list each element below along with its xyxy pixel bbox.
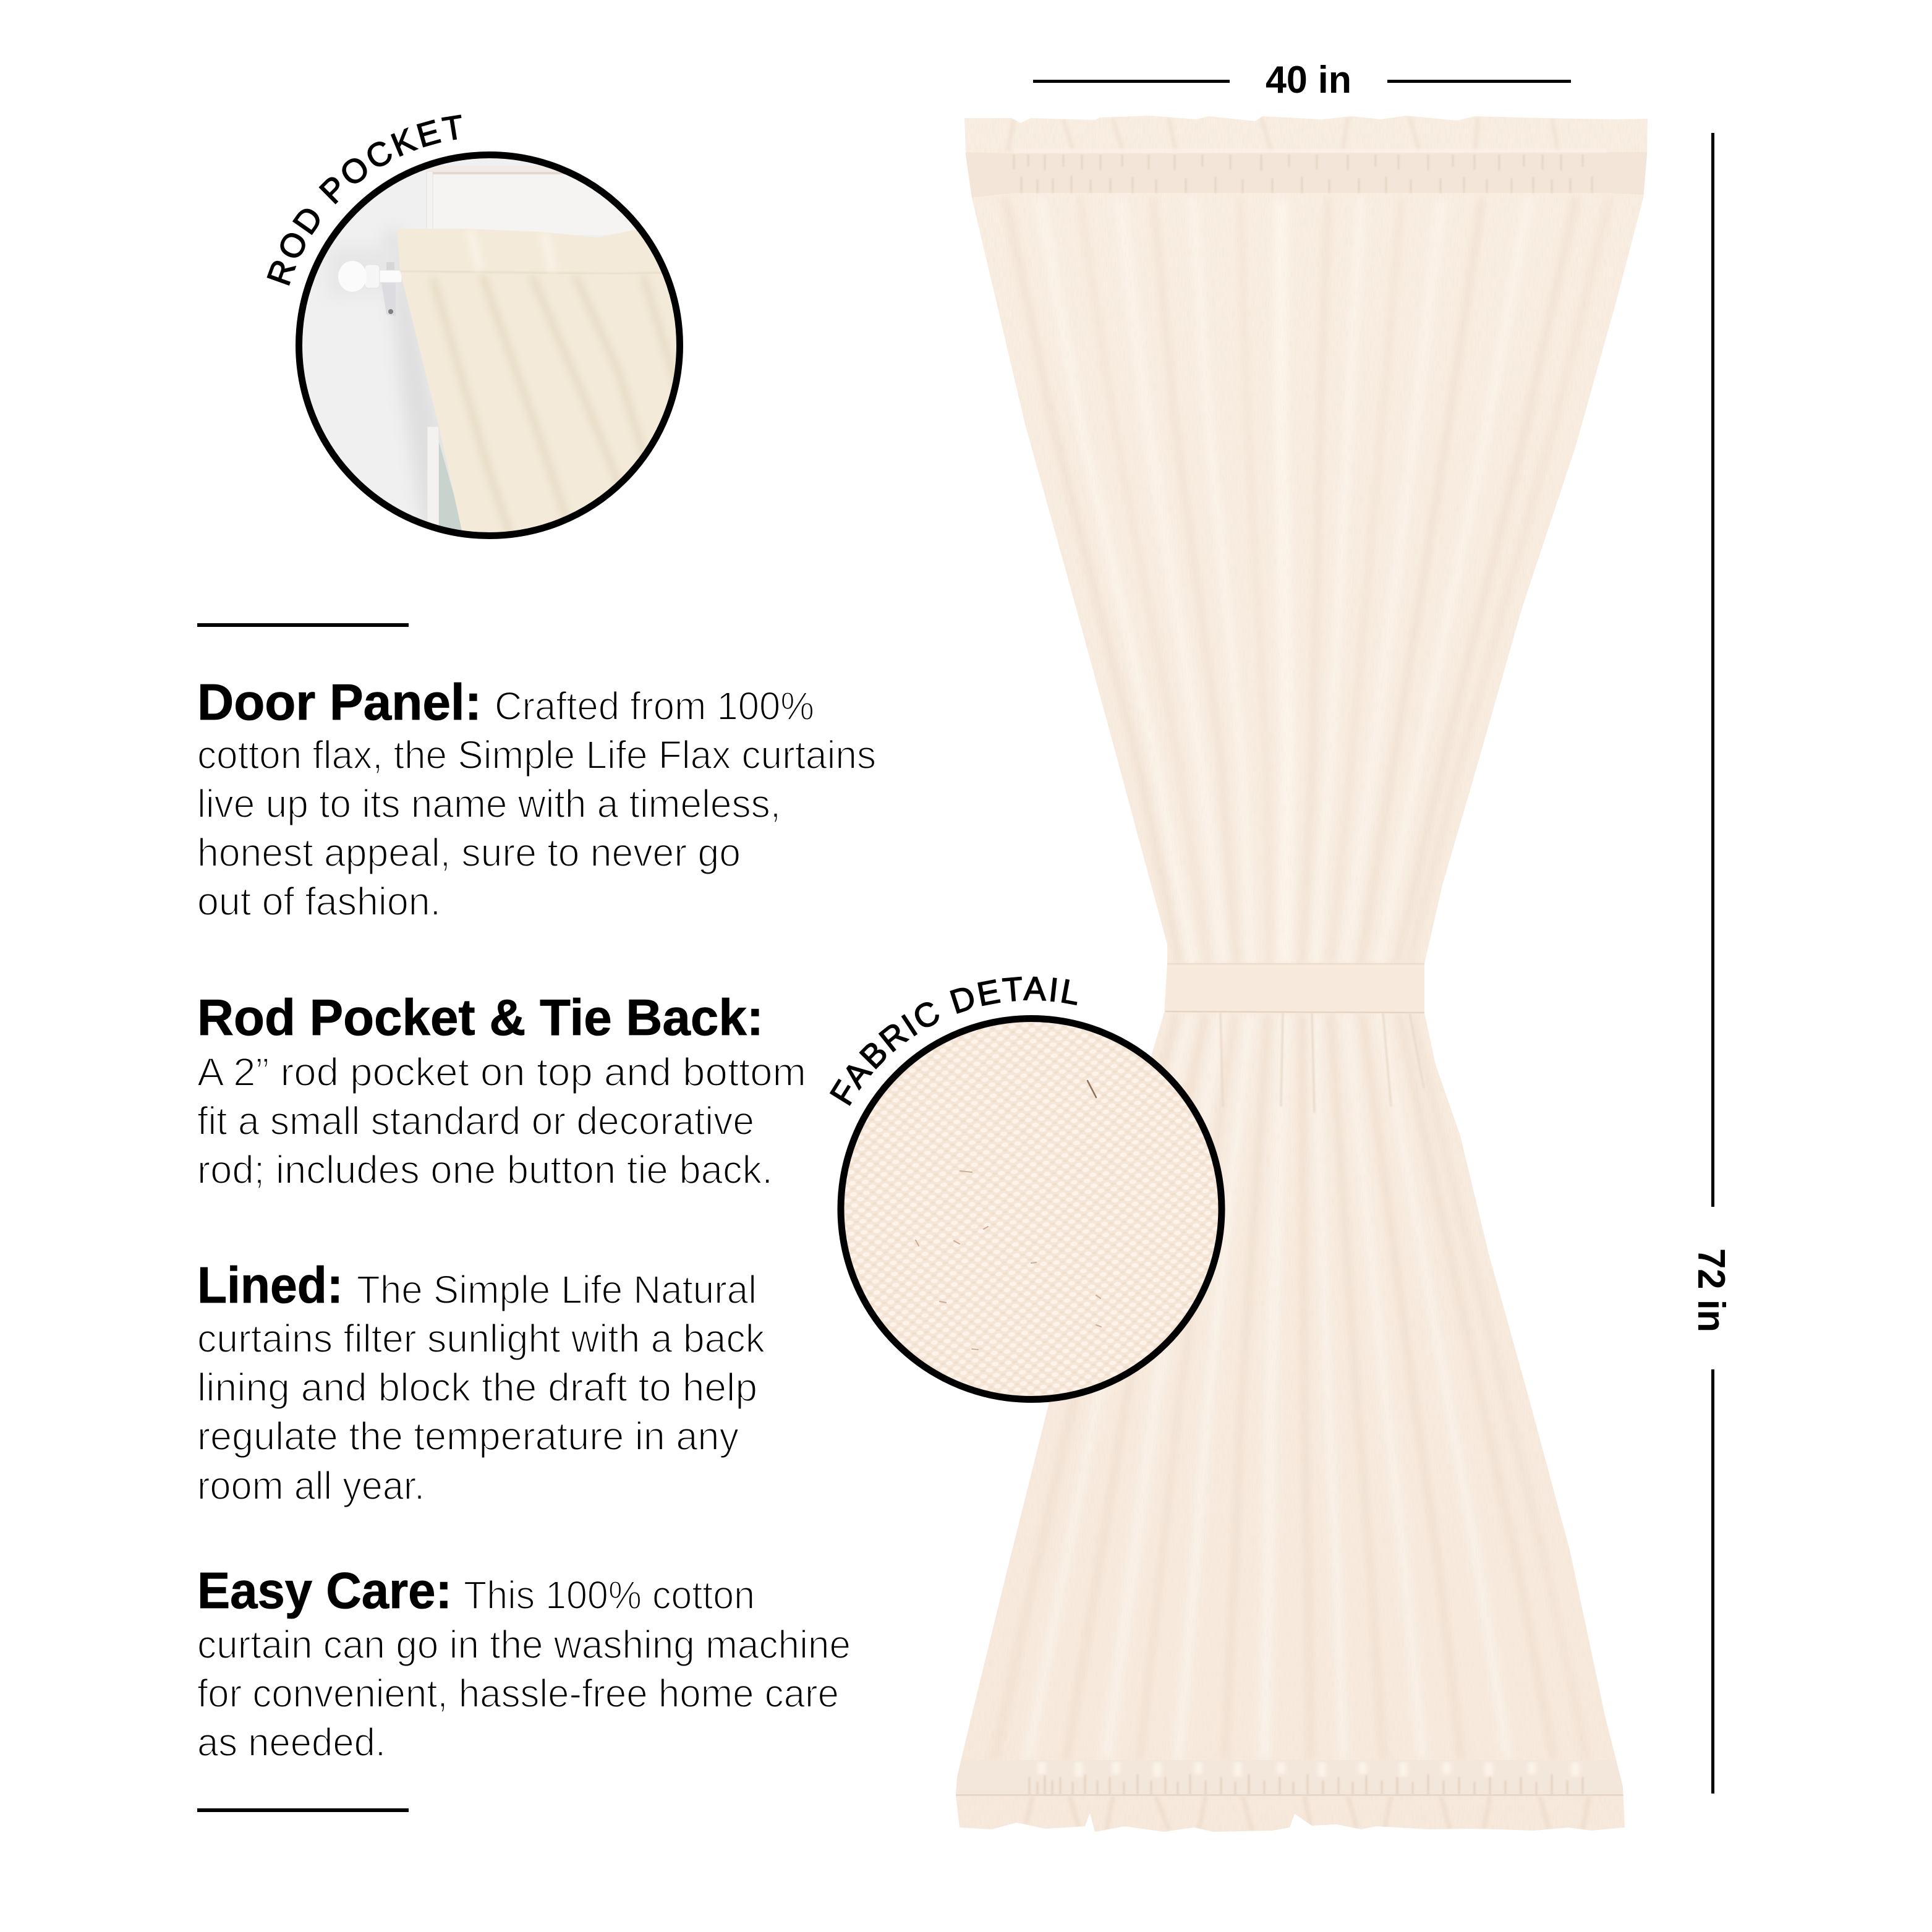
door panel text block: honest appeal, sure to never go [197,830,741,875]
lower folds [1027,1018,1518,1758]
door panel text block: Crafted from 100% [495,684,814,728]
rod pocket photo [302,158,676,532]
hem puffs [1042,1762,1575,1777]
door panel text block: live up to its name with a timeless, [197,781,781,826]
top ruffle folds [1008,119,1558,148]
bottom frill folds [1026,1796,1589,1830]
top gathers [1014,155,1592,193]
upper folds [1005,198,1610,964]
fabric detail inset [830,977,1225,1403]
lined text block: curtains filter sunlight with a back [197,1316,765,1361]
rod pocket and tie back text block: rod; includes one button tie back. [197,1147,773,1192]
lined text block: room all year. [197,1463,425,1508]
rod pocket label: ROD POCKET [267,114,461,286]
fabric slub texture [946,105,1663,1842]
rod pocket and tie back text block: Rod Pocket & Tie Back: [197,989,764,1046]
door panel text block: cotton flax, the Simple Life Flax curtains [197,733,876,777]
door panel text block [197,673,876,924]
bottom rod pocket band [946,1760,1638,1795]
fabric weave swatch [835,1014,1230,1410]
lined text block: The Simple Life Natural [357,1267,757,1312]
bottom gathers [1029,1774,1583,1795]
rod pocket and tie back text block [197,989,806,1192]
tie back band [1165,964,1424,1113]
door panel text block: Door Panel: [197,673,482,731]
easy care text block: This 100% cotton [464,1573,755,1617]
easy care text block: curtain can go in the washing machine [197,1622,851,1667]
top rule [197,623,409,627]
height dimension: 72 in [1690,133,1732,1794]
width dimension: 40 in [1033,59,1571,101]
width dimension: 40 in: 40 in [1266,59,1351,101]
rod pocket and tie back text block: A 2” rod pocket on top and bottom [197,1050,806,1094]
curtain panel [946,105,1663,1842]
lined text block: lining and block the draft to help [197,1365,757,1410]
fabric ring [841,1019,1222,1400]
rod pocket inset [267,114,683,539]
lined text block: regulate the temperature in any [197,1414,739,1458]
fabric detail label: FABRIC DETAIL [830,977,1077,1106]
easy care text block: as needed. [197,1720,386,1764]
rod pocket and tie back text block: fit a small standard or decorative [197,1099,754,1143]
easy care text block: for convenient, hassle-free home care [197,1671,839,1716]
lined text block: Lined: [197,1256,343,1314]
height dimension: 72 in: 72 in [1690,1248,1732,1332]
bottom rule [197,1808,409,1812]
easy care text block [197,1562,851,1764]
easy care text block: Easy Care: [197,1562,452,1619]
rod pocket ring [299,155,680,535]
curtain body [946,105,1663,1842]
door panel text block: out of fashion. [197,879,441,924]
lined text block [197,1256,765,1508]
top rod pocket band [958,152,1657,199]
